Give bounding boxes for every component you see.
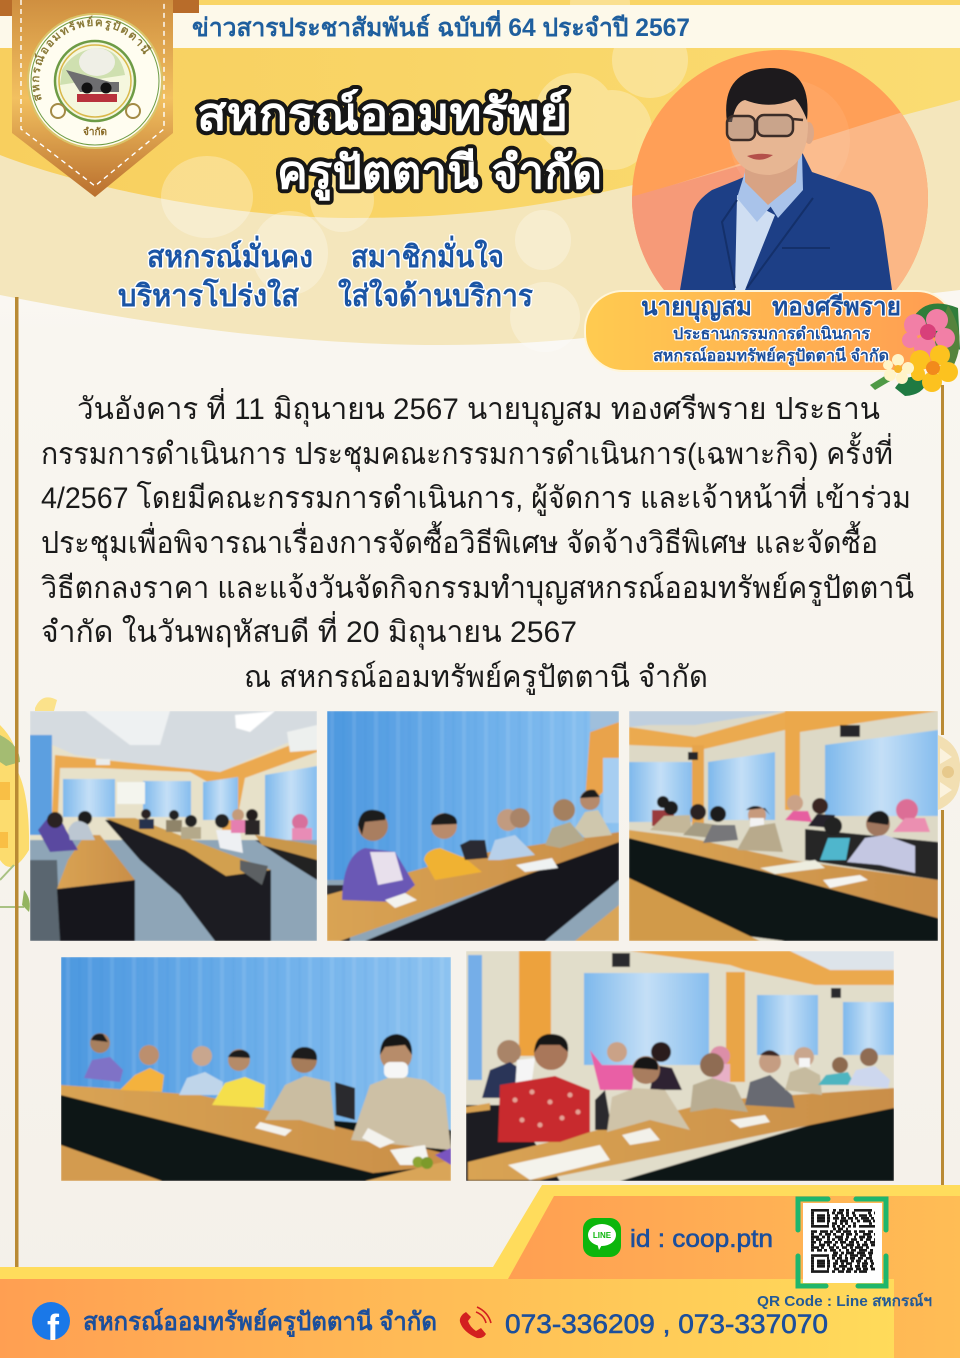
neck (745, 160, 798, 205)
QR modules (811, 1210, 875, 1272)
LINE id contact (583, 1218, 773, 1257)
suit (680, 152, 892, 290)
photo 3: members at long table (629, 711, 938, 941)
people (650, 795, 930, 888)
news body text: 4/2567 โดยมีคณะกรรมการดำเนินการ, ผู้จัดการ และเจ้าหน้าที่ เข้าร่วม (41, 477, 911, 516)
icon: Facebook: f (47, 1307, 60, 1348)
newsletter issue text: ข่าวสารประชาสัมพันธ์ ฉบับที่ 64 ประจำปี 2567 (192, 10, 690, 42)
logo seal: สหกรณ์ออมทรัพย์ครูปัตตานี (32, 16, 152, 102)
Facebook contact (32, 1302, 437, 1348)
glasses (727, 115, 803, 140)
news body text: วันอังคาร ที่ 11 มิถุนายน 2567 นายบุญสม ทองศรีพราย ประธาน (77, 388, 880, 428)
organisation title: ครูปัตตานี จำกัด (277, 146, 602, 201)
logo seal: จำกัด (83, 126, 107, 138)
head (804, 122, 814, 144)
right ornament (938, 735, 960, 810)
photo 2: members along curtain (327, 711, 619, 941)
people (84, 1033, 451, 1169)
chairman nameplate: สหกรณ์ออมทรัพย์ครูปัตตานี จำกัด (653, 346, 889, 367)
newsletter header strip (0, 5, 960, 48)
header background bands (0, 0, 960, 352)
slogan: สหกรณ์มั่นคง (147, 235, 313, 274)
people (482, 1034, 890, 1180)
phone contact: 073-336209 , 073-337070 (505, 1309, 828, 1339)
icon: phone (460, 1307, 491, 1338)
chairman portrait (632, 50, 928, 290)
chairman nameplate: ทองศรีพราย (772, 293, 901, 321)
news body text: ประชุมเพื่อพิจารณาเรื่องการจัดซื้อวิธีพิเศษ จัดจ้างวิธีพิเศษ และจัดซื้อ (41, 521, 878, 562)
LINE id contact: id : coop.ptn (630, 1225, 773, 1253)
slogan: สมาชิกมั่นใจ (351, 235, 504, 274)
QR code block (757, 1199, 932, 1310)
icon: Facebook (32, 1302, 70, 1348)
icon: LINE: LINE (593, 1231, 612, 1240)
QR code block: QR Code : Line สหกรณ์ฯ (757, 1292, 932, 1310)
news body text: กรรมการดำเนินการ ประชุมคณะกรรมการดำเนินการ(เฉพาะกิจ) ครั้งที่ (41, 432, 893, 473)
chairman nameplate (585, 291, 955, 371)
people (38, 809, 312, 853)
news body text: จำกัด ในวันพฤหัสบดี ที่ 20 มิถุนายน 2567 (41, 611, 577, 651)
news body text: วิธีตกลงราคา และแจ้งวันจัดกิจกรรมทำบุญสหกรณ์ออมทรัพย์ครูปัตตานี (41, 571, 914, 607)
photo 1: meeting room wide view (30, 711, 317, 941)
slogan (118, 235, 533, 313)
people (342, 790, 612, 908)
QR frame corners (798, 1199, 886, 1286)
Facebook contact: สหกรณ์ออมทรัพย์ครูปัตตานี จำกัด (83, 1307, 437, 1338)
gold side rails (15, 297, 944, 1267)
white bubbles (161, 0, 688, 352)
footer banner (0, 1185, 960, 1358)
chairman nameplate: นายบุญสม (641, 293, 752, 323)
logo seal (27, 13, 163, 149)
organisation title: สหกรณ์ออมทรัพย์ (197, 88, 568, 140)
left yellow flower decoration (0, 697, 57, 912)
ribbon with cooperative logo (0, 0, 199, 197)
news body text (41, 388, 914, 695)
photo 5: committee with red-shirt member (466, 951, 894, 1181)
tropical flowers (870, 304, 960, 396)
slogan: บริหารโปร่งใส (118, 277, 300, 313)
news body text: ณ สหกรณ์ออมทรัพย์ครูปัตตานี จำกัด (244, 660, 708, 695)
chairman nameplate: ประธานกรรมการดำเนินการ (673, 325, 870, 343)
slogan: ใส่ใจด้านบริการ (338, 278, 533, 313)
photo 4: officers in uniform (61, 957, 451, 1181)
organisation title (197, 88, 602, 201)
icon: LINE (583, 1218, 621, 1257)
